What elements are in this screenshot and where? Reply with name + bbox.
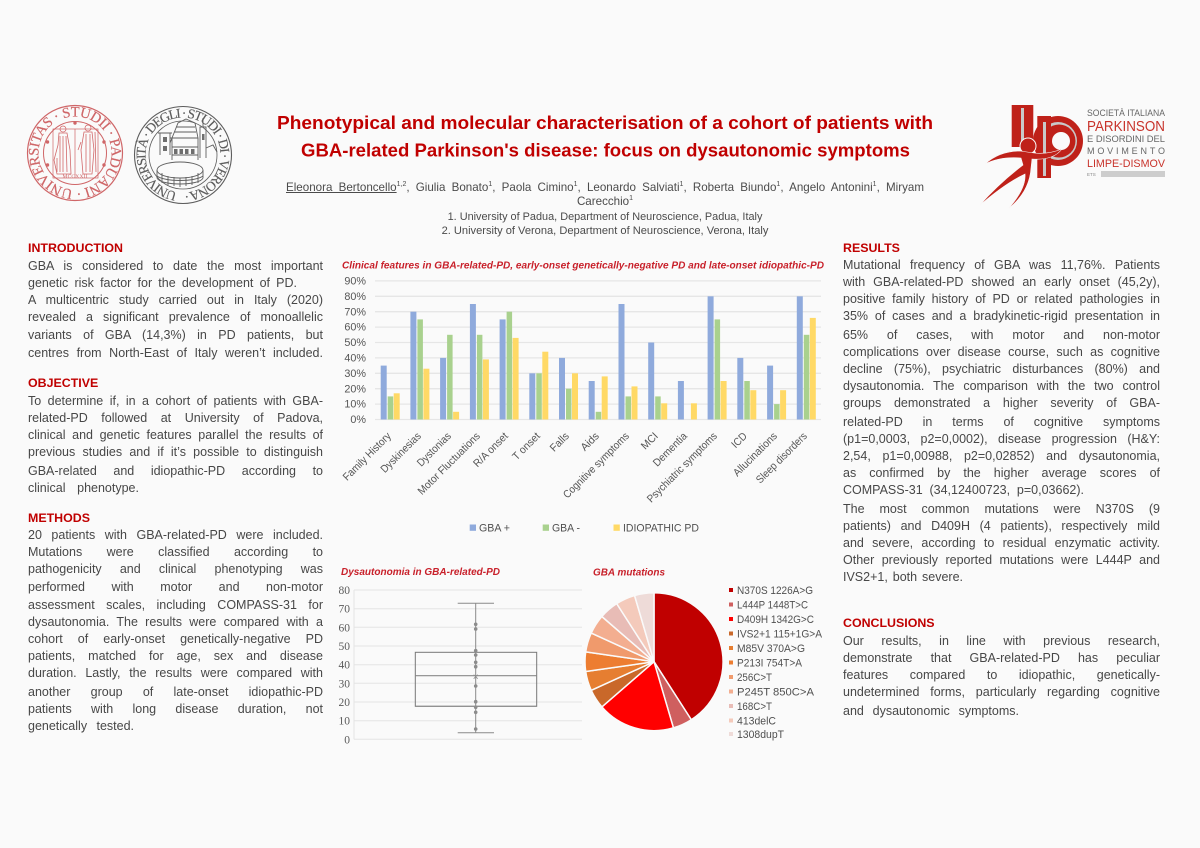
text block: objective xyxy=(28,394,323,495)
text block: objective: clinical phenotype. xyxy=(28,481,139,495)
title xyxy=(277,113,933,160)
text block: results: groups demonstrated a higher severity of GBA- xyxy=(843,396,1160,410)
x axis labels: Sleep disorders xyxy=(754,430,810,486)
text block: objective: previous studies and if it’s possible to distinguish xyxy=(28,445,323,459)
y axis labels: 30 xyxy=(338,678,350,690)
logo: University of Padua seal: UNIVERSITAS · STUDII · PADUANI · xyxy=(28,106,122,200)
text block: methods: pathogenicity and clinical phenotyping was xyxy=(28,562,323,576)
text block: conclusions: Our results, in line with previous research, xyxy=(843,634,1160,648)
text block: conclusions xyxy=(843,634,1160,718)
text block: results: Mutational frequency of GBA was 11,76%. Patients xyxy=(843,258,1160,272)
x axis labels: Aids xyxy=(578,430,602,454)
y axis labels: 40% xyxy=(344,352,366,364)
chart: clinical features bar chart xyxy=(341,260,824,534)
text block: results: 65% of cases, with motor and non-motor xyxy=(843,328,1160,342)
pie legend: D409H 1342G>C xyxy=(737,614,814,626)
heading: results: RESULTS xyxy=(843,241,900,255)
text block: results: 2,54, p1=0,00988, p2=0,02852) and dysautonomia, xyxy=(843,449,1160,463)
authors and affiliations: Carecchio1 xyxy=(577,195,633,208)
text block: results: related-PD in terms of cognitive symptoms xyxy=(843,415,1160,429)
chart title: clinical features: Clinical features in GBA-related-PD, early-onset genetically-negative PD and late-onset idiopathic-PD xyxy=(342,260,824,272)
x axis labels: MCI xyxy=(639,430,661,452)
heading: conclusions: CONCLUSIONS xyxy=(843,616,935,630)
text block: objective: To determine if, in a cohort of patients with GBA- xyxy=(28,394,323,408)
text block: conclusions: undetermined forms, particularly regarding cognitive xyxy=(843,685,1160,699)
pie legend: 1308dupT xyxy=(737,729,784,741)
y axis labels: 20 xyxy=(338,697,350,709)
authors and affiliations: Eleonora Bertoncello1,2, Giulia Bonato1, Paola Cimino1, Leonardo Salviati1, Roberta Biundo1, Angelo Antonini1, Miryam xyxy=(286,181,924,194)
y axis labels: 60 xyxy=(338,622,350,634)
chart: GBA mutations pie chart xyxy=(586,568,823,741)
text block: conclusions: features compared to idiopathic, genetically- xyxy=(843,668,1160,682)
text block: results: 35% of cases and a bradykinetic-rigid presentation in xyxy=(843,309,1160,323)
y axis labels: 0% xyxy=(350,414,366,426)
y axis labels xyxy=(344,276,366,426)
y axis labels: 10% xyxy=(344,399,366,411)
text block: introduction: A multicentric study carried out in Italy (2020) xyxy=(28,293,323,307)
text block: results: dysautonomia. The comparison with the two control xyxy=(843,379,1160,393)
text block: introduction: centres from North-East of Italy weren’t included. xyxy=(28,346,323,360)
chart title: GBA mutations: GBA mutations xyxy=(593,568,665,578)
text block: conclusions: and dysautonomic symptoms. xyxy=(843,704,1019,718)
logo: LIMPE-DISMOV society: PARKINSON xyxy=(1087,119,1165,135)
text block: objective: GBA-related and idiopathic-PD according to xyxy=(28,464,323,478)
y axis labels: 10 xyxy=(338,716,350,728)
chart legend: IDIOPATHIC PD xyxy=(623,522,699,534)
text block: methods: duration. Lastly, the results were compared with xyxy=(28,666,323,680)
text block: results: complications over disease course, such as cognitive xyxy=(843,345,1160,359)
logo: University of Verona seal: UNIVERSITÀ · DEGLI · STUDI · DI · VERONA · xyxy=(136,108,230,201)
text block: results: (p1=0,0003, p2=0,0002), disease progression (H&Y: xyxy=(843,432,1160,446)
pie legend: 168C>T xyxy=(737,701,772,713)
logo: LIMPE-DISMOV society: ETS xyxy=(1087,172,1096,177)
text block: conclusions: demonstrate that GBA-related-PD has peculiar xyxy=(843,651,1160,665)
y axis labels: 60% xyxy=(344,322,366,334)
authors and affiliations: 1. University of Padua, Department of Neuroscience, Padua, Italy xyxy=(448,210,762,222)
x axis labels: Allucinations xyxy=(731,430,780,479)
panel: methods xyxy=(28,511,323,733)
text block: results: and severe, according to residual enzymatic activity. xyxy=(843,536,1160,550)
text block: methods xyxy=(28,528,323,733)
text block: results: patients) and D409H (4 patients), respectively mild xyxy=(843,519,1160,533)
pie legend: M85V 370A>G xyxy=(737,643,805,655)
text block: objective: clinical and genetic features parallel the results of xyxy=(28,428,323,442)
text block: introduction: GBA is considered to date the most important xyxy=(28,259,323,273)
x axis labels: Dyskinesias xyxy=(379,430,424,476)
pie legend: IVS2+1 115+1G>A xyxy=(737,628,823,640)
y axis labels: 80% xyxy=(344,291,366,303)
x axis labels xyxy=(341,430,810,505)
x axis labels: Motor Fluctuations xyxy=(416,430,483,497)
y axis labels: 20% xyxy=(344,383,366,395)
pie slices xyxy=(585,593,723,731)
data points xyxy=(474,622,478,731)
text block: methods: Mutations were classified according to xyxy=(28,545,323,559)
logo: LIMPE-DISMOV society xyxy=(982,105,1166,208)
pie legend: P213I 754T>A xyxy=(737,658,803,670)
box and whiskers xyxy=(415,603,537,733)
pie legend: L444P 1448T>C xyxy=(737,600,808,612)
y axis labels: 70 xyxy=(338,604,350,616)
y axis labels xyxy=(338,585,350,746)
logo: LIMPE-DISMOV society: MOVIMENTO xyxy=(1087,146,1165,156)
pie legend: P245T 850C>A xyxy=(737,686,815,698)
logo: LIMPE-DISMOV society: E DISORDINI DEL xyxy=(1087,134,1165,144)
text block: introduction: revealed a significant prevalence of monoallelic xyxy=(28,310,323,324)
pie legend: N370S 1226A>G xyxy=(737,585,813,597)
text block: methods: dysautonomia. The results were compared with a xyxy=(28,615,323,629)
text block: methods: performed with motor and non-motor xyxy=(28,580,323,594)
pie legend: 413delC xyxy=(737,716,776,728)
x axis labels: Cognitive symptoms xyxy=(561,430,632,501)
text block: results: Other previously reported mutations were L444P and xyxy=(843,553,1160,567)
text block: methods: patients, matched for age, sex and disease xyxy=(28,649,323,663)
text block: results: The most common mutations were N370S (9 xyxy=(843,502,1160,516)
y axis labels: 0 xyxy=(344,734,350,746)
title: Phenotypical and molecular characterisation of a cohort of patients with xyxy=(277,113,933,133)
logo: University of Padua seal: MCCXXII xyxy=(62,174,88,180)
bars: idiopathic PD xyxy=(394,318,816,420)
text block: results: decline (75%), psychiatric disturbances (80%) and xyxy=(843,362,1160,376)
x axis labels: Psychiatric symptoms xyxy=(645,430,720,505)
x axis labels: Family History xyxy=(341,430,394,483)
bars: GBA - xyxy=(388,312,809,420)
heading: introduction: INTRODUCTION xyxy=(28,241,123,255)
panel: objective xyxy=(28,376,323,495)
y axis labels: 40 xyxy=(338,660,350,672)
panel: results xyxy=(843,241,1160,584)
panel: introduction xyxy=(28,241,323,360)
text block: methods: genetically tested. xyxy=(28,719,134,733)
x axis labels: ICD xyxy=(729,430,750,451)
text block: methods: patients with long disease duration, not xyxy=(28,702,323,716)
y axis labels: 70% xyxy=(344,306,366,318)
x axis labels: Dystonias xyxy=(415,430,454,469)
heading: methods: METHODS xyxy=(28,511,90,525)
text block: introduction: variants of GBA (14,3%) in PD patients, but xyxy=(28,328,323,342)
chart legend: GBA + xyxy=(479,522,510,534)
x axis labels: R/A onset xyxy=(471,430,511,470)
y axis labels: 90% xyxy=(344,276,366,288)
chart: dysautonomia box plot xyxy=(338,567,582,746)
text block: results: as confirmed by the higher average scores of xyxy=(843,466,1160,480)
text block: methods: 20 patients with GBA-related-PD were included. xyxy=(28,528,323,542)
x axis labels: T onset xyxy=(510,430,543,463)
bars: GBA + xyxy=(381,296,803,420)
authors and affiliations: 2. University of Verona, Department of Neuroscience, Verona, Italy xyxy=(442,224,768,236)
logo: LIMPE-DISMOV society: LIMPE-DISMOV xyxy=(1087,158,1166,170)
x axis labels: Falls xyxy=(548,430,572,454)
x axis labels: Dementia xyxy=(651,430,690,469)
panel: conclusions xyxy=(843,616,1160,718)
logo: LIMPE-DISMOV society: SOCIETÀ ITALIANA xyxy=(1087,108,1165,118)
text block: introduction xyxy=(28,259,323,360)
y axis labels: 50% xyxy=(344,337,366,349)
text block: results: IVS2+1, both severe. xyxy=(843,570,963,584)
text block: results: with GBA-related-PD showed an early onset (45,2y), xyxy=(843,275,1160,289)
heading: objective: OBJECTIVE xyxy=(28,376,98,390)
text block: objective: related-PD followed at University of Padova, xyxy=(28,411,323,425)
y axis labels: 80 xyxy=(338,585,350,597)
pie legend: 256C>T xyxy=(737,672,772,684)
title: GBA-related Parkinson's disease: focus on dysautonomic symptoms xyxy=(301,140,910,160)
text block: results: positive family history of PD or related pathologies in xyxy=(843,292,1160,306)
text block: methods: assessment scales, including COMPASS-31 for xyxy=(28,598,323,612)
y axis labels: 30% xyxy=(344,368,366,380)
chart legend: GBA - xyxy=(552,522,580,534)
y axis labels: 50 xyxy=(338,641,350,653)
text block: methods: another group of late-onset idiopathic-PD xyxy=(28,685,323,699)
chart title: dysautonomia: Dysautonomia in GBA-related-PD xyxy=(341,567,500,578)
pie legend xyxy=(729,585,823,741)
text block: results: COMPASS-31 (34,12400723, p=0,03662). xyxy=(843,483,1084,497)
text block: methods: cohort of early-onset genetically-negative PD xyxy=(28,632,323,646)
chart legend xyxy=(470,522,699,534)
text block: results xyxy=(843,258,1160,584)
text block: introduction: genetic risk factor for the development of PD. xyxy=(28,276,297,290)
authors and affiliations xyxy=(286,181,924,236)
